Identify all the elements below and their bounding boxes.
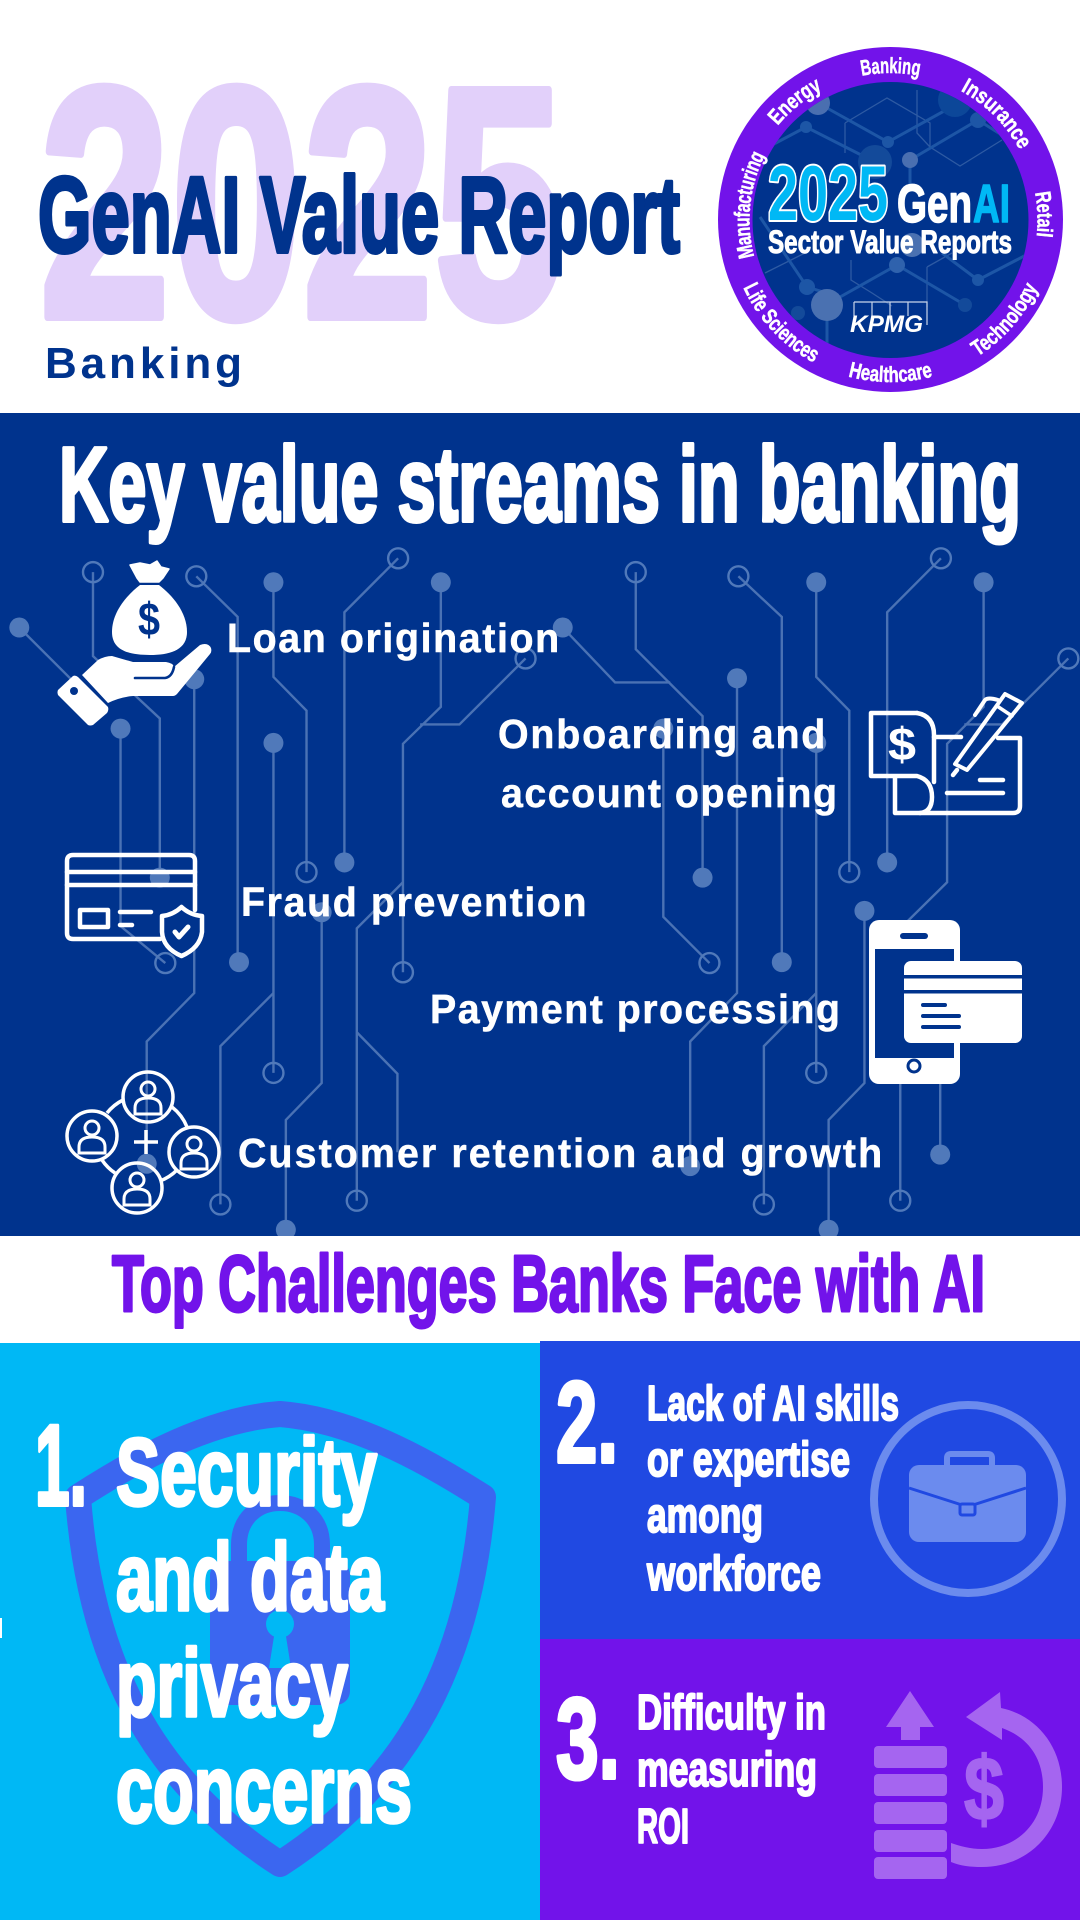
- badge network pattern: [760, 83, 1030, 350]
- text: difficulty in measuring ROI: ROI: [637, 1800, 689, 1854]
- icon: ROI stack and return arrow: $: [964, 1740, 1004, 1840]
- icon: customer network: [67, 1072, 219, 1213]
- label: fraud prevention: Fraud prevention: [241, 879, 587, 925]
- badge ring labels: Manufacturing: [733, 151, 768, 260]
- badge ring labels: Healthcare: [848, 362, 932, 382]
- text: lack of AI skills: workforce: [646, 1547, 821, 1601]
- big 2025 watermark: 2025: [39, 18, 565, 387]
- number 1: 1.: [35, 1402, 87, 1530]
- badge: 2025 GenAI Sector Value Reports: [718, 47, 1063, 392]
- number 3: 3.: [556, 1675, 620, 1803]
- badge ring labels: Energy: [766, 79, 820, 126]
- badge ring labels: Life Sciences: [743, 282, 818, 362]
- label: onboarding and account opening: account opening: [501, 770, 837, 816]
- text: difficulty in measuring ROI: [637, 1686, 826, 1854]
- badge ring labels: Banking: [860, 56, 920, 80]
- title: GenAI Value Report: GenAI Value Report: [38, 154, 680, 275]
- text: security and data privacy concerns: [116, 1419, 412, 1843]
- subtitle: Banking: Banking: [45, 339, 242, 388]
- text: difficulty in measuring ROI: measuring: [637, 1743, 817, 1797]
- icon: money bag in hand: $: [138, 593, 160, 645]
- badge ring labels: [733, 56, 1054, 382]
- badge ring labels: Technology: [969, 282, 1040, 355]
- text: lack of AI skills: [646, 1377, 899, 1601]
- header background: [0, 0, 1080, 413]
- text: security and data privacy concerns: Security: [116, 1419, 377, 1526]
- text: security and data privacy concerns: concerns: [116, 1736, 412, 1843]
- badge ring labels: Retail: [1035, 191, 1054, 238]
- text: security and data privacy concerns: privacy: [116, 1630, 348, 1737]
- label: onboarding and account opening: [498, 711, 837, 816]
- label: payment processing: Payment processing: [430, 986, 840, 1032]
- text: security and data privacy concerns: and data: [116, 1524, 384, 1631]
- panel: key value streams: [0, 413, 1080, 1240]
- text: lack of AI skills: or expertise: [647, 1433, 850, 1487]
- text: difficulty in measuring ROI: Difficulty in: [637, 1686, 826, 1740]
- panel: challenge 2: [540, 1341, 1080, 1639]
- number 2: 2.: [556, 1359, 618, 1487]
- label: onboarding and account opening: Onboarding and: [498, 711, 825, 757]
- badge ring labels: Insurance: [961, 78, 1028, 148]
- icon: ROI stack and return arrow: [874, 1691, 1062, 1879]
- badge heading Gen: Gen: [897, 174, 972, 234]
- panel: challenge 3: [540, 1639, 1080, 1920]
- text: lack of AI skills: among: [647, 1489, 763, 1543]
- icon: cheque and pen: $: [888, 718, 916, 770]
- icon: phone with card: [869, 920, 1022, 1084]
- icon: credit card with shield: [67, 855, 202, 956]
- badge heading 2025: 2025: [768, 149, 888, 237]
- circuit pattern: [9, 548, 1078, 1240]
- label: customer retention and growth: Customer retention and growth: [238, 1130, 882, 1176]
- icon: money bag in hand: [58, 561, 211, 726]
- panel: challenge 1: [0, 1343, 540, 1920]
- text: lack of AI skills: Lack of AI skills: [647, 1377, 899, 1431]
- notch: [0, 1618, 2, 1638]
- label: loan origination: Loan origination: [227, 615, 559, 661]
- icon: briefcase in circle: [874, 1405, 1062, 1593]
- badge heading AI: AI: [973, 174, 1010, 234]
- KPMG logo: KPMG: [850, 311, 923, 338]
- icon: shield and lock: [78, 1414, 483, 1864]
- icon: cheque and pen: [871, 694, 1022, 813]
